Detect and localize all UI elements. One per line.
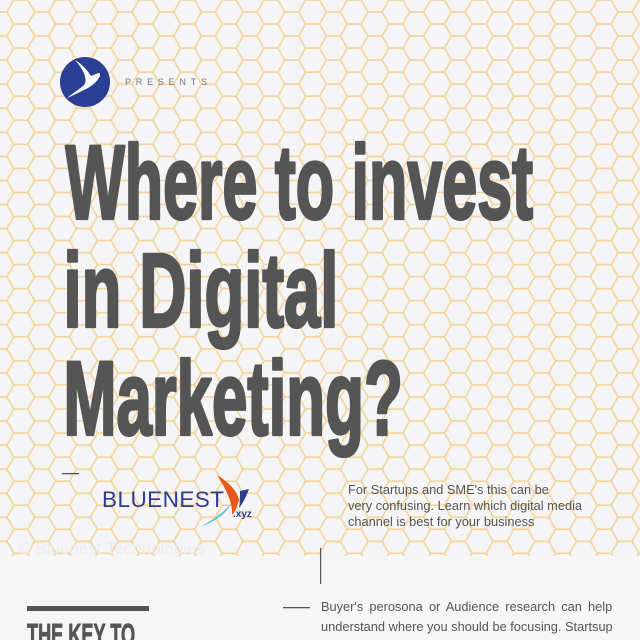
body text: understand where you should be focusing. Startsup <box>321 619 613 634</box>
heading bar <box>27 606 149 611</box>
vertical divider <box>320 548 321 584</box>
Bluenest logo: BLUENEST <box>102 487 224 512</box>
intro text: channel is best for your business <box>348 514 534 529</box>
title: Marketing? <box>64 340 403 457</box>
Bluenest logo: .xyz <box>233 509 252 520</box>
body text: Buyer's perosona or Audience research can help <box>321 599 612 614</box>
body dash <box>283 607 310 608</box>
title: Where to invest <box>66 125 533 242</box>
intro text <box>348 482 583 529</box>
title: in Digital <box>64 232 338 349</box>
title <box>64 125 533 457</box>
intro text: For Startups and SME's this can be <box>348 482 549 497</box>
copyright watermark: © Bluenest Technologies <box>18 539 205 558</box>
short dash above logo <box>62 473 79 474</box>
presents label: PRESENTS <box>125 77 207 87</box>
intro text: very confusing. Learn which digital media <box>348 498 583 513</box>
icon: bird logo badge <box>60 57 110 107</box>
Bluenest logo <box>102 475 252 527</box>
body text <box>321 599 613 634</box>
